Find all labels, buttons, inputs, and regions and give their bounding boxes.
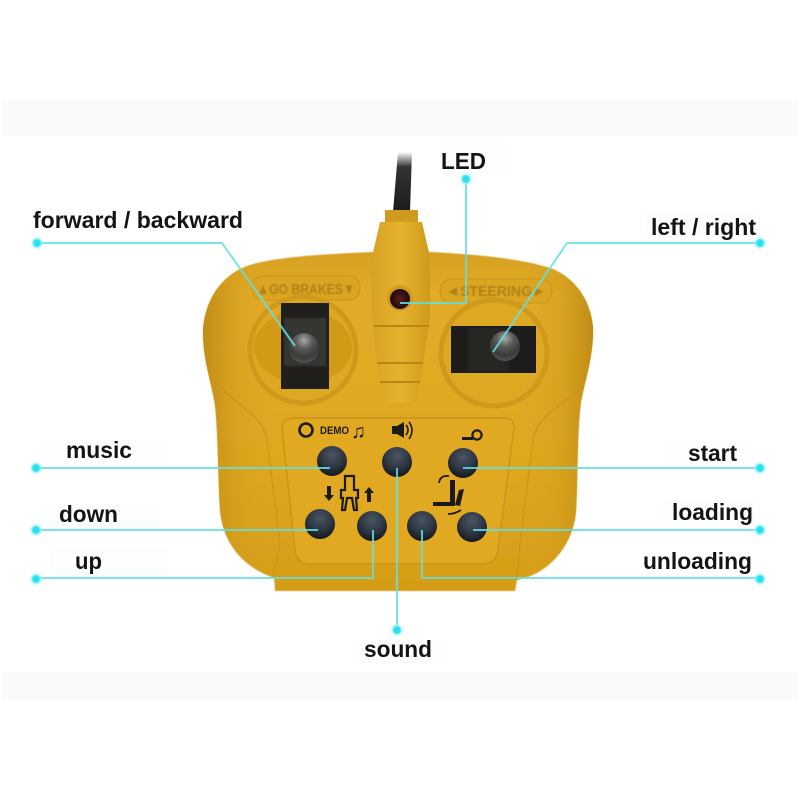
labels: start [688, 440, 737, 466]
forklift mast icon [341, 476, 358, 510]
panel symbols: DEMO [320, 425, 349, 437]
labels: loading [672, 499, 753, 525]
down arrow [324, 486, 334, 501]
labels: down [59, 501, 118, 527]
left joystick [250, 297, 356, 403]
labels [33, 148, 756, 662]
right joystick [441, 300, 547, 406]
bottom pale band [2, 673, 798, 700]
lower contour lines [213, 380, 583, 580]
up arrow [364, 487, 374, 502]
labels: left / right [651, 214, 756, 240]
demo icon [300, 424, 312, 436]
tipper icon [433, 480, 455, 506]
cable [393, 152, 412, 212]
labels: LED [441, 148, 486, 174]
panel symbols [300, 421, 482, 514]
labels: unloading [643, 548, 752, 574]
controller body [203, 252, 593, 591]
labels: sound [364, 636, 432, 662]
key icon [462, 430, 482, 440]
steering label plate [440, 279, 552, 303]
steering label plate: ◄STEERING► [446, 283, 546, 300]
speaker icon [392, 422, 404, 438]
callout lines [37, 178, 760, 630]
buttons [305, 446, 487, 542]
labels: forward / backward [33, 207, 243, 233]
go brakes label plate [252, 276, 360, 300]
labels: up [75, 548, 102, 574]
top pale band [2, 100, 798, 136]
music note icon: ♫ [351, 421, 366, 443]
controller [203, 152, 593, 591]
LED [387, 285, 413, 311]
labels: music [66, 437, 132, 463]
callout dots [29, 172, 767, 637]
label backgrounds [46, 142, 757, 664]
go brakes label plate: ▲GO BRAKES▼ [257, 281, 355, 298]
center spine [372, 210, 430, 402]
button panel [282, 418, 514, 564]
